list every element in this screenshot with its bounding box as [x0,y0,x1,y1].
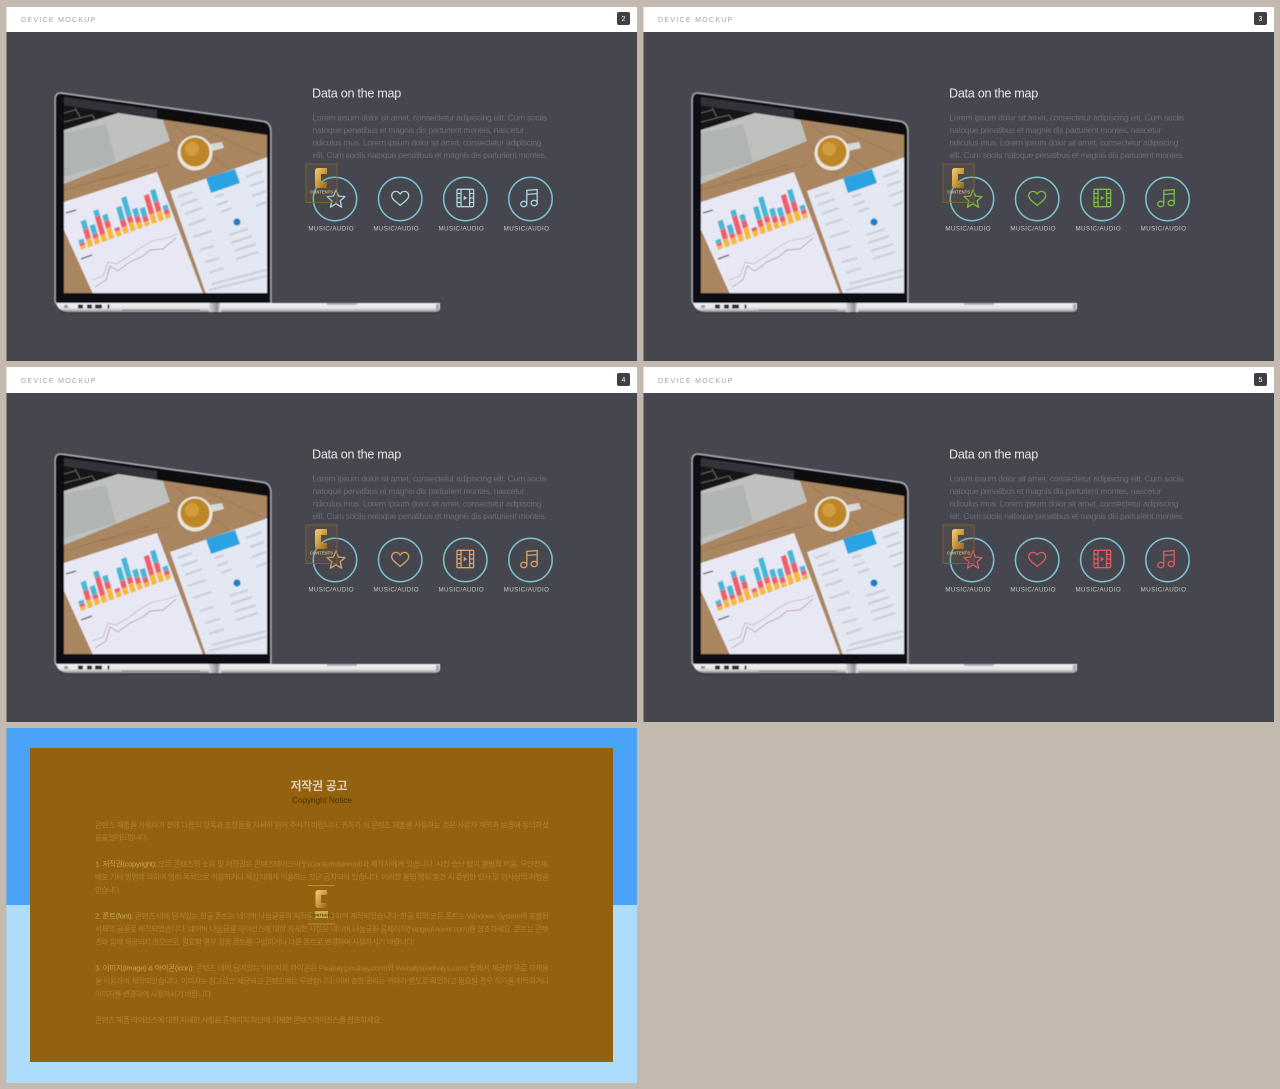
icon circles row: MUSIC/AUDIO [308,586,354,594]
body text: Lorem ipsum dolor sit amet, consectetur adipiscing elit. Cum sociis [312,112,547,122]
header bar: DEVICE MOCKUP [21,378,97,385]
body text: natoque penatibus et magnis dis parturient montes, nascetur [950,486,1162,496]
page number badge: 2 [622,16,626,23]
watermark logo: CONTENTS [310,190,333,194]
body text: ridiculus mus. Lorem ipsum dolor sit amet, consectetur adipiscing [950,498,1179,508]
watermark logo [306,164,337,202]
header bar [644,367,1274,393]
header bar: DEVICE MOCKUP [658,17,734,24]
page number badge [1254,373,1267,386]
icon circles row [308,177,552,232]
panel: slide 2 [6,7,637,361]
body text: Lorem ipsum dolor sit amet, consectetur adipiscing elit. Cum sociis [312,474,547,484]
notice body text: 2. 폰트(font): 콘텐츠 내에 담겨있는 한글 폰트는 네이버 나눔글꼴의 저작물을 이용하여 제작되었습니다. 한글 외의 모든 폰트는 Windows System에 포함된 [95,910,549,920]
heading: Data on the map [312,448,402,462]
page number badge [1254,12,1267,25]
body text: elit. Cum sociis natoque penatibus et magnis dis parturient montes. [312,511,547,521]
notice body text [95,820,549,1024]
panel: copyright notice [6,728,637,1083]
icon circles row: MUSIC/AUDIO [945,586,991,594]
laptop mockup [692,93,1077,313]
watermark logo: CONTENTS [310,550,333,556]
body text: natoque penatibus et magnis dis parturient montes, nascetur [312,125,525,135]
body text: Lorem ipsum dolor sit amet, consectetur adipiscing elit. Cum sociis [950,112,1184,122]
watermark logo [943,525,974,564]
body text: ridiculus mus. Lorem ipsum dolor sit amet, consectetur adipiscing [312,138,542,148]
body text: elit. Cum sociis natoque penatibus et magnis dis parturient montes. [950,511,1184,521]
dark slide body [6,32,637,361]
blue background lower [6,905,637,1083]
icon circles row: MUSIC/AUDIO [373,226,419,232]
header bar [6,367,637,393]
page number badge: 4 [622,377,626,384]
laptop mockup [55,454,440,674]
dark slide body [644,32,1274,361]
icon circles row: MUSIC/AUDIO [1141,586,1186,594]
heading: Data on the map [312,86,402,100]
page number badge [617,373,630,386]
notice subtitle: Copyright Notice [292,795,352,805]
page number badge: 3 [1259,16,1263,23]
notice body text: 받습니다. [95,884,121,894]
notice body text: 3. 이미지(image) & 아이콘(icon): 콘텐츠 내에 담겨있는 이미지와 아이콘은 Pixabay(pixabay.com)와 Webalys(webalys.com) 등에서 제공한 무료 자재들 [95,962,549,972]
panel: slide 4 [6,367,637,722]
blue background upper [6,728,637,905]
header bar [6,7,637,32]
icon circles row: MUSIC/AUDIO [308,226,354,232]
brown notice card [30,748,613,1062]
notice body text: 서체의 글꼴로 제작되었습니다. 네이버 나눔글꼴 라이선스에 대한 자세한 사항은 네이버 나눔글꼴 홈페이지(hangeul.naver.com)를 참조하세요. 폰트는 콘텐 [95,924,549,934]
body text: natoque penatibus et magnis dis parturient montes, nascetur [312,486,525,496]
icon circles row: MUSIC/AUDIO [1075,586,1121,594]
notice body text: 배포 기타 방법에 의하여 영리 목적으로 이용하거나 제삼자에게 이용하는 것은 금지되어 있습니다. 이러한 불법 행위 발견 시 준엄한 민사 및 형사상의 처벌을 [95,872,549,882]
watermark logo [308,886,335,924]
icon circles row: MUSIC/AUDIO [1010,586,1056,594]
icon circles row [945,177,1189,232]
panel: slide 3 [644,7,1274,361]
icon circles row [308,538,552,594]
notice body text: 이미지를 변경하여 사용하시기 바랍니다. [95,988,213,998]
body text [312,474,547,521]
body text: ridiculus mus. Lorem ipsum dolor sit amet, consectetur adipiscing [312,498,542,508]
icon circles row: MUSIC/AUDIO [1141,226,1186,232]
heading: Data on the map [949,448,1038,462]
header bar: DEVICE MOCKUP [21,17,97,24]
page number badge: 5 [1259,377,1263,384]
header bar [644,7,1274,32]
icon circles row: MUSIC/AUDIO [504,226,549,232]
icon circles row: MUSIC/AUDIO [504,586,549,594]
watermark logo [943,164,974,202]
body text: Lorem ipsum dolor sit amet, consectetur adipiscing elit. Cum sociis [950,474,1184,484]
body text: ridiculus mus. Lorem ipsum dolor sit amet, consectetur adipiscing [950,138,1179,148]
notice title: 저작권 공고 [290,778,348,793]
notice body text: 츠와 함께 제공되지 않으므로, 필요할 경우 정품 폰트를 구입하거나 다른 폰트로 변경하여 사용하시기 바랍니다. [95,936,415,946]
icon circles row: MUSIC/AUDIO [1010,226,1056,232]
laptop mockup [692,454,1077,674]
body text [950,112,1184,160]
dark slide body [6,393,637,722]
body text [950,474,1184,521]
icon circles row: MUSIC/AUDIO [373,586,419,594]
panel: slide 5 [644,367,1274,722]
icon circles row: MUSIC/AUDIO [438,226,484,232]
header bar: DEVICE MOCKUP [658,378,734,385]
body text: elit. Cum sociis natoque penatibus et magnis dis parturient montes. [950,150,1184,160]
icon circles row [945,538,1189,594]
body text: elit. Cum sociis natoque penatibus et magnis dis parturient montes. [312,150,547,160]
watermark logo: CONTENTS [947,190,970,194]
watermark logo: CONTENTS [947,550,970,556]
watermark logo: CONTENTS [310,912,333,918]
notice body text: 을 이용하여 제작되었습니다. 이미지는 참고로만 제공되고 콘텐츠에는 무관합니다. 이에 관한 권리는 귀하가 별도로 확인하고 필요할 경우 허가를 취득하거나 [95,976,549,986]
notice body text: 음을 알려드립니다. [95,832,148,842]
body text [312,112,547,160]
laptop mockup [55,93,440,313]
page number badge [617,12,630,25]
notice body text: 콘텐츠 제품을 사용하기 전에 다음의 항목과 조항들을 자세히 읽어 주시기 바랍니다. 귀하가 이 콘텐츠 제품을 사용하는 것은 사용자 계약과 보증에 동의하셨 [95,820,549,830]
heading: Data on the map [949,86,1038,100]
dark slide body [644,393,1274,722]
body text: natoque penatibus et magnis dis parturient montes, nascetur [950,125,1162,135]
notice body text: 1. 저작권(copyright): 모든 콘텐츠의 소유 및 저작권은 콘텐츠테이크아웃(Contentstakeout)과 제작자에게 있습니다. 사전 승낙 없이 불법적 이용, 무단전재, [95,858,549,868]
icon circles row: MUSIC/AUDIO [945,226,991,232]
watermark logo [306,525,337,564]
icon circles row: MUSIC/AUDIO [1075,226,1121,232]
icon circles row: MUSIC/AUDIO [438,586,484,594]
notice body text: 콘텐츠 제품 라이선스에 대한 자세한 사항은 홈페이지 하단에 기재한 콘텐츠라이선스를 참조하세요. [95,1014,382,1024]
